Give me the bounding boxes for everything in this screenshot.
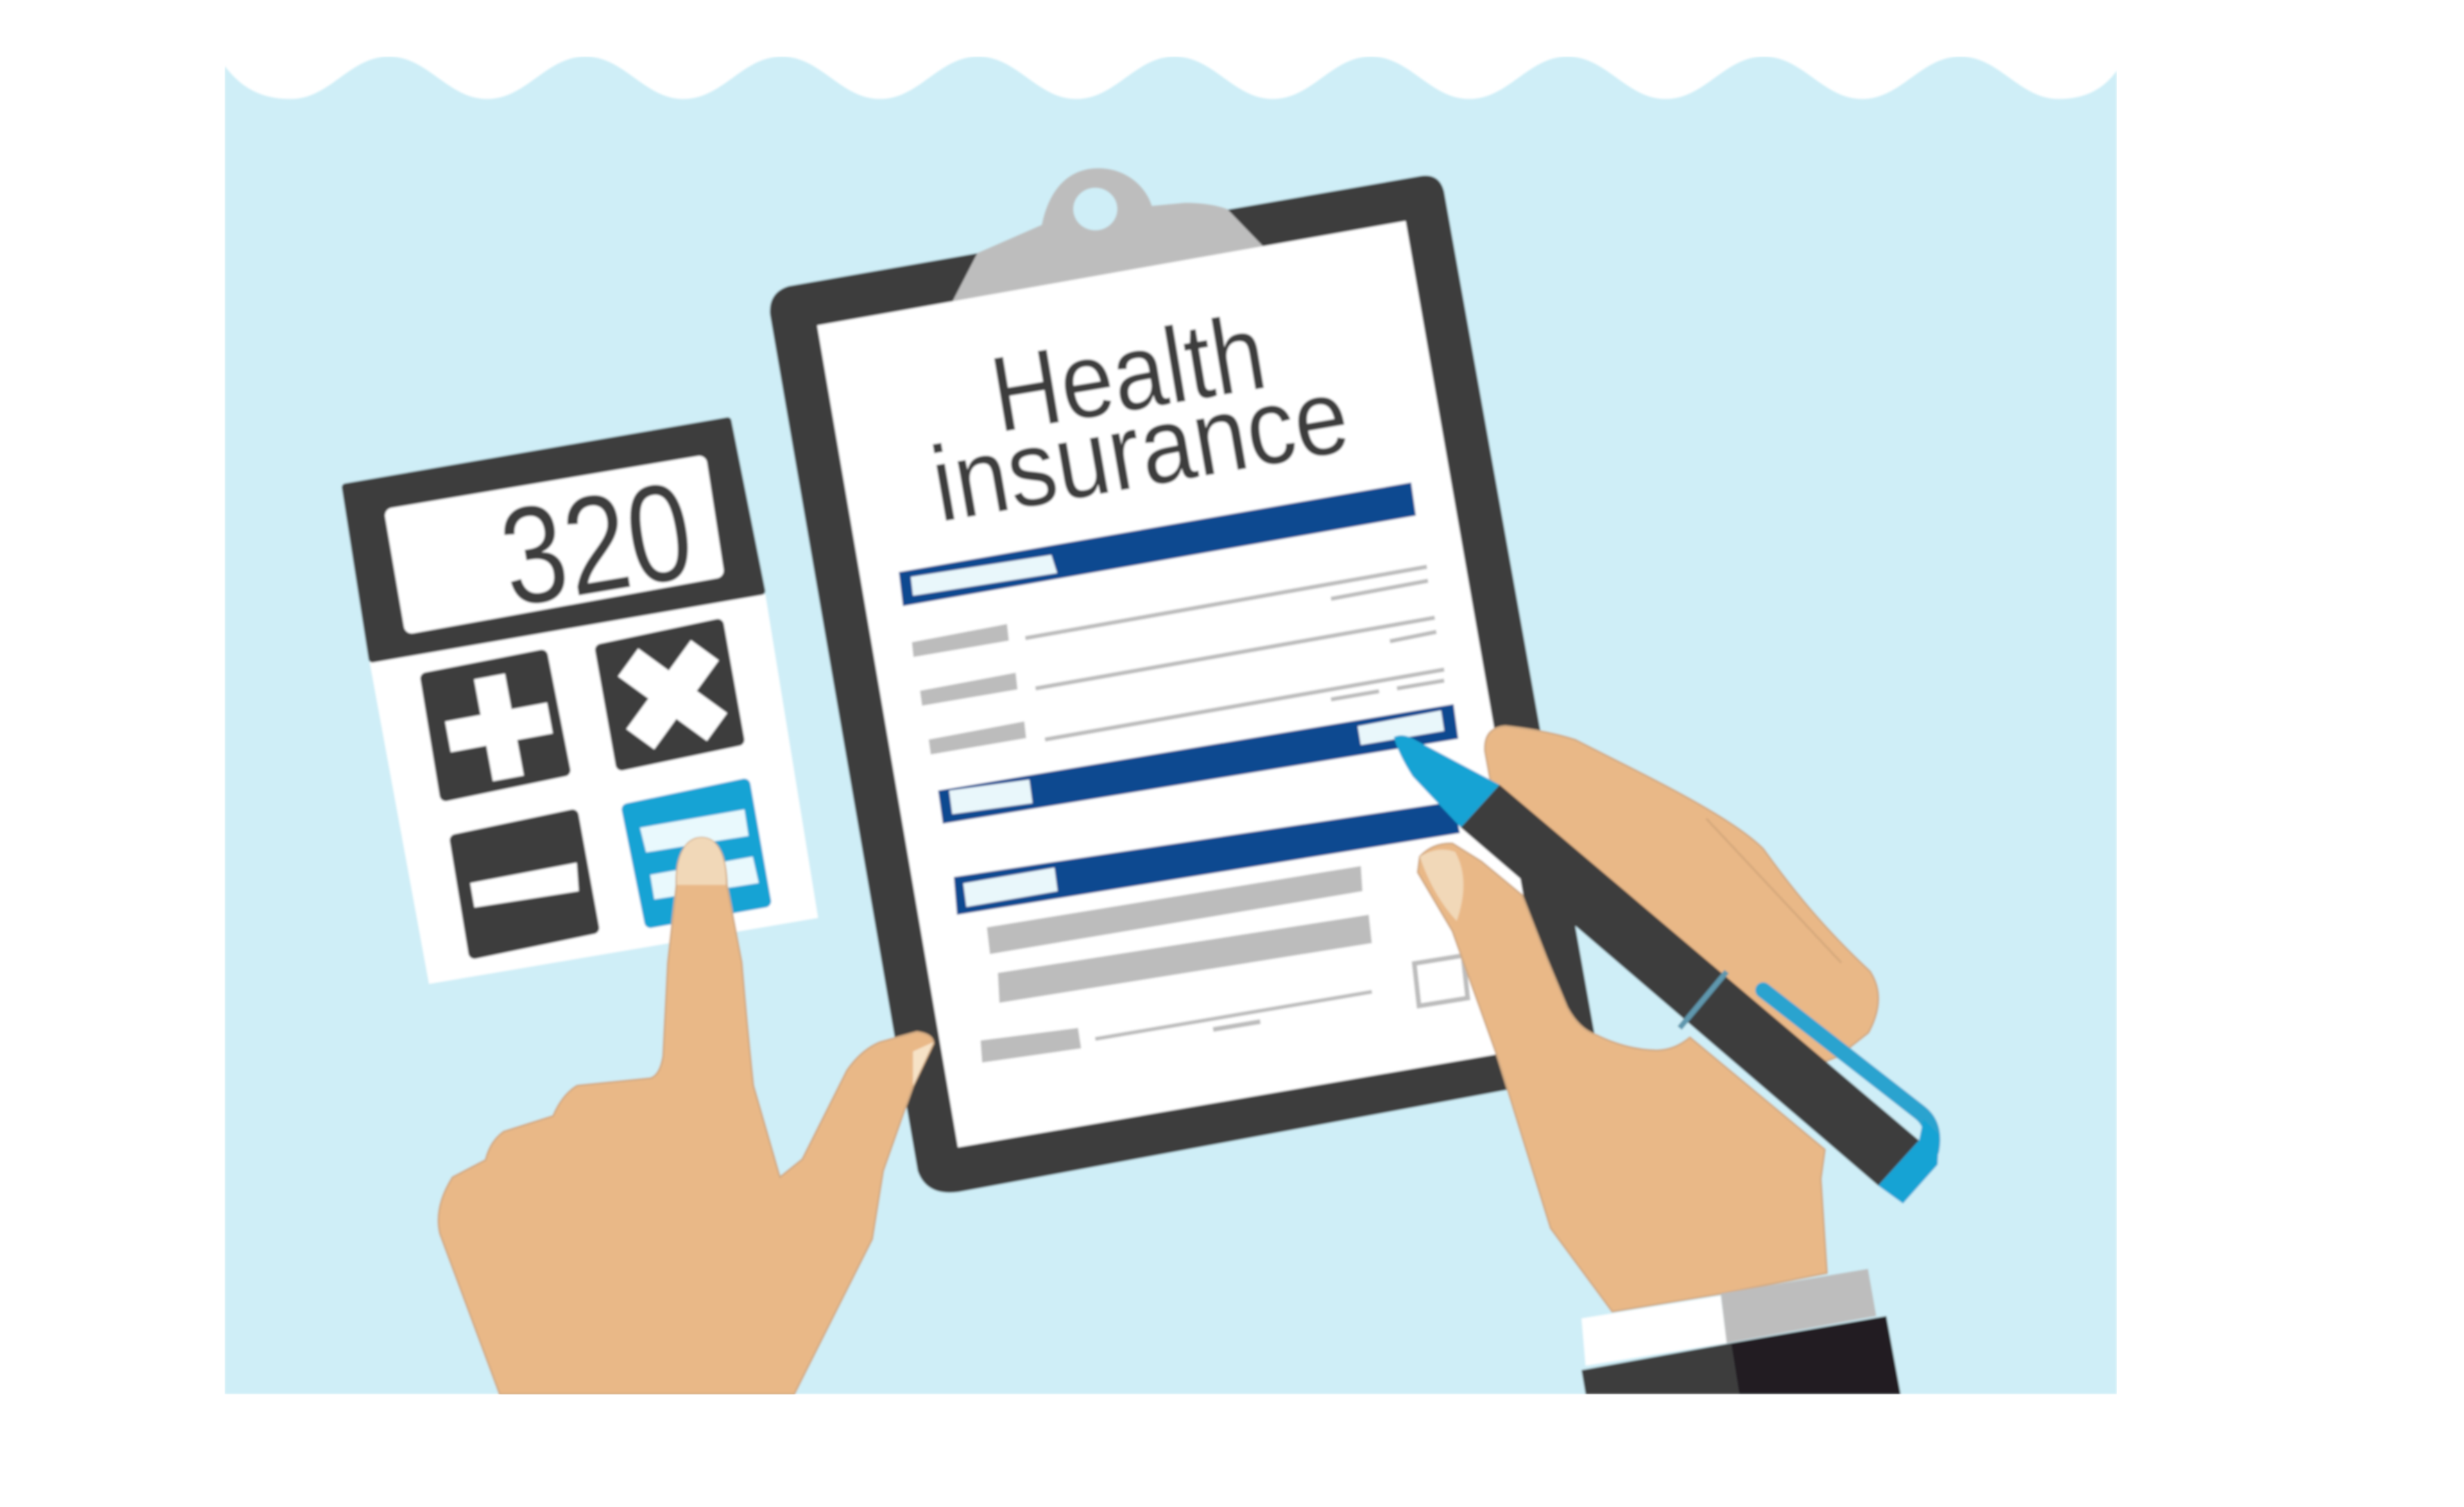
heading: Health insurance: insurance [923, 355, 1357, 544]
form section bar 2 [938, 704, 1459, 823]
pen band [1680, 972, 1727, 1028]
paper sheet [817, 221, 1550, 1148]
thumb nail [1420, 850, 1464, 921]
left hand pressing calculator [438, 838, 934, 1394]
right hand holding pen [1417, 726, 1901, 1394]
calculator display [393, 463, 716, 626]
jacket sleeve dark grey [1582, 1343, 1739, 1394]
calculator head [346, 421, 762, 659]
clipboard board [770, 176, 1597, 1193]
palm and thumb [1417, 843, 1827, 1312]
thumb nail [913, 1042, 934, 1086]
hand shape [438, 838, 934, 1394]
form lower fields [980, 866, 1467, 1062]
shirt cuff grey [1721, 1269, 1876, 1343]
calculator [346, 421, 818, 984]
equals key [628, 785, 765, 922]
pen body [1461, 785, 1919, 1185]
pen tip [1394, 736, 1500, 827]
multiply key [595, 618, 749, 771]
minus key [456, 816, 593, 952]
form section bar 3 [954, 802, 1460, 915]
form rows: grey labels and lines [912, 567, 1444, 754]
pen clip [1763, 990, 1932, 1151]
fingertip nail [677, 838, 726, 885]
form section bar 1 [899, 483, 1416, 606]
calculator body [370, 594, 818, 984]
shirt cuff white [1582, 1296, 1727, 1366]
clipboard clip [952, 168, 1268, 302]
pen [1394, 736, 1939, 1203]
jacket sleeve black [1731, 1316, 1901, 1394]
panel: wavy light blue background [225, 56, 2117, 1394]
pen end cap [1878, 1119, 1939, 1203]
plus key [427, 656, 564, 795]
heading: Health insurance: Health [983, 292, 1274, 455]
artwork with soft edges [225, 56, 2117, 1394]
finger crease [1706, 818, 1841, 963]
upper fingers [1485, 726, 1878, 1069]
display digits 320: 320 [490, 452, 703, 636]
clipboard with form [770, 168, 1597, 1193]
